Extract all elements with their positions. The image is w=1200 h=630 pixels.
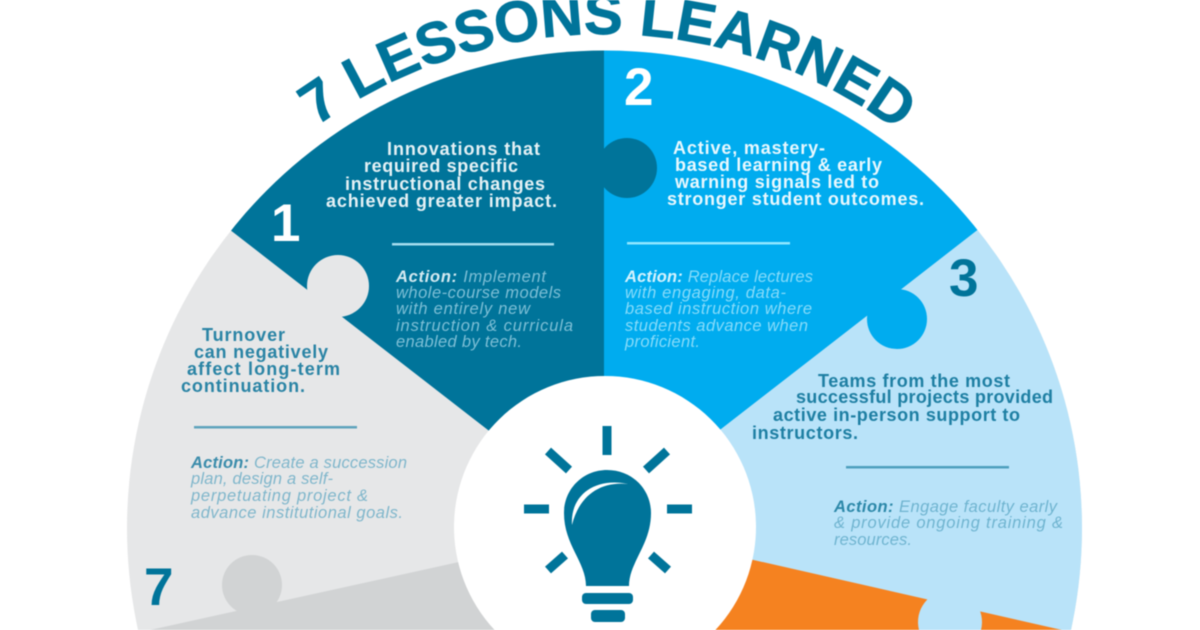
action text: lesson 7: advance institutional goals. — [191, 504, 403, 522]
action text: lesson 3 — [833, 498, 1063, 549]
action text: lesson 1 — [395, 268, 573, 351]
text block: lesson 1: required specific — [364, 156, 518, 176]
text block: lesson 3: instructors. — [752, 423, 858, 443]
panel: lesson 7 background — [127, 230, 488, 630]
action text: lesson 2: Action: Replace lectures — [624, 268, 813, 286]
action text: lesson 1: with entirely new — [396, 300, 531, 318]
action text: lesson 7: perpetuating project & — [190, 487, 368, 505]
action text: lesson 1: enabled by tech. — [396, 333, 522, 351]
panel: lesson 2 — [603, 50, 978, 430]
text block: lesson 7: can negatively — [194, 342, 328, 362]
action text: lesson 2: based instruction where — [625, 300, 812, 318]
action text: lesson 7: Action: Create a succession — [190, 454, 407, 472]
action text: lesson 2 — [624, 268, 813, 351]
text block: lesson 1 — [326, 139, 557, 211]
number 3: 3 — [949, 249, 978, 308]
text block: lesson 3 — [752, 371, 1053, 443]
puzzle knob: orange notch — [917, 598, 983, 630]
divider lesson 1 — [392, 243, 554, 246]
text block: lesson 1: achieved greater impact. — [326, 191, 557, 211]
text block: lesson 7: continuation. — [181, 376, 305, 396]
divider lesson 3 — [846, 466, 1009, 468]
text block: lesson 2: Active, mastery- — [673, 138, 825, 158]
puzzle knob: grey segment into lesson 7 — [222, 555, 282, 615]
action text: lesson 3: resources. — [834, 531, 912, 549]
action text: lesson 2: students advance when — [625, 317, 808, 335]
action text: lesson 7 — [190, 454, 407, 522]
action text: lesson 2: with engaging, data- — [625, 284, 786, 302]
panel: lesson 6 grey segment — [153, 562, 494, 630]
action text: lesson 1: instruction & curricula — [396, 317, 573, 335]
action text: lesson 3: Action: Engage faculty early — [833, 498, 1059, 516]
number 7: 7 — [144, 558, 173, 617]
center white circle — [454, 376, 756, 630]
text block: lesson 7: affect long-term — [187, 359, 340, 379]
puzzle knob: lesson 2 into lesson 3 — [867, 289, 927, 349]
divider lesson 7 — [194, 426, 357, 428]
text block: lesson 7 — [181, 325, 340, 396]
panel: lesson 1 — [230, 50, 605, 432]
number 2: 2 — [624, 58, 653, 117]
puzzle knob: lesson 1 into lesson 2 — [597, 138, 657, 198]
text block: lesson 2 — [667, 138, 924, 209]
text block: lesson 3: successful projects provided — [796, 387, 1053, 407]
number 1: 1 — [271, 194, 300, 253]
action text: lesson 1: Action: Implement — [395, 268, 547, 286]
action text: lesson 7: plan, design a self- — [190, 470, 334, 488]
puzzle knob: lesson 7 into lesson 1 — [307, 255, 369, 317]
segmented puzzle semicircle — [127, 50, 1082, 630]
icon: light bulb — [524, 426, 692, 622]
action text: lesson 1: whole-course models — [396, 284, 561, 302]
text block: lesson 2: warning signals led to — [674, 172, 879, 192]
text block: lesson 1: Innovations that — [387, 139, 540, 159]
text block: lesson 3: Teams from the most — [818, 371, 1010, 391]
action text: lesson 3: & provide ongoing training & — [834, 514, 1063, 532]
panel: lesson 4 orange segment — [715, 559, 1062, 630]
text block: lesson 7: Turnover — [202, 325, 285, 345]
text block: lesson 2: stronger student outcomes. — [667, 189, 924, 209]
text block: lesson 3: active in-person support to — [773, 405, 1020, 425]
text block: lesson 1: instructional changes — [345, 174, 545, 194]
action text: lesson 2: proficient. — [624, 333, 700, 351]
divider lesson 2 — [627, 242, 790, 244]
panel: lesson 3 — [720, 230, 1082, 630]
text block: lesson 2: based learning & early — [675, 155, 882, 175]
